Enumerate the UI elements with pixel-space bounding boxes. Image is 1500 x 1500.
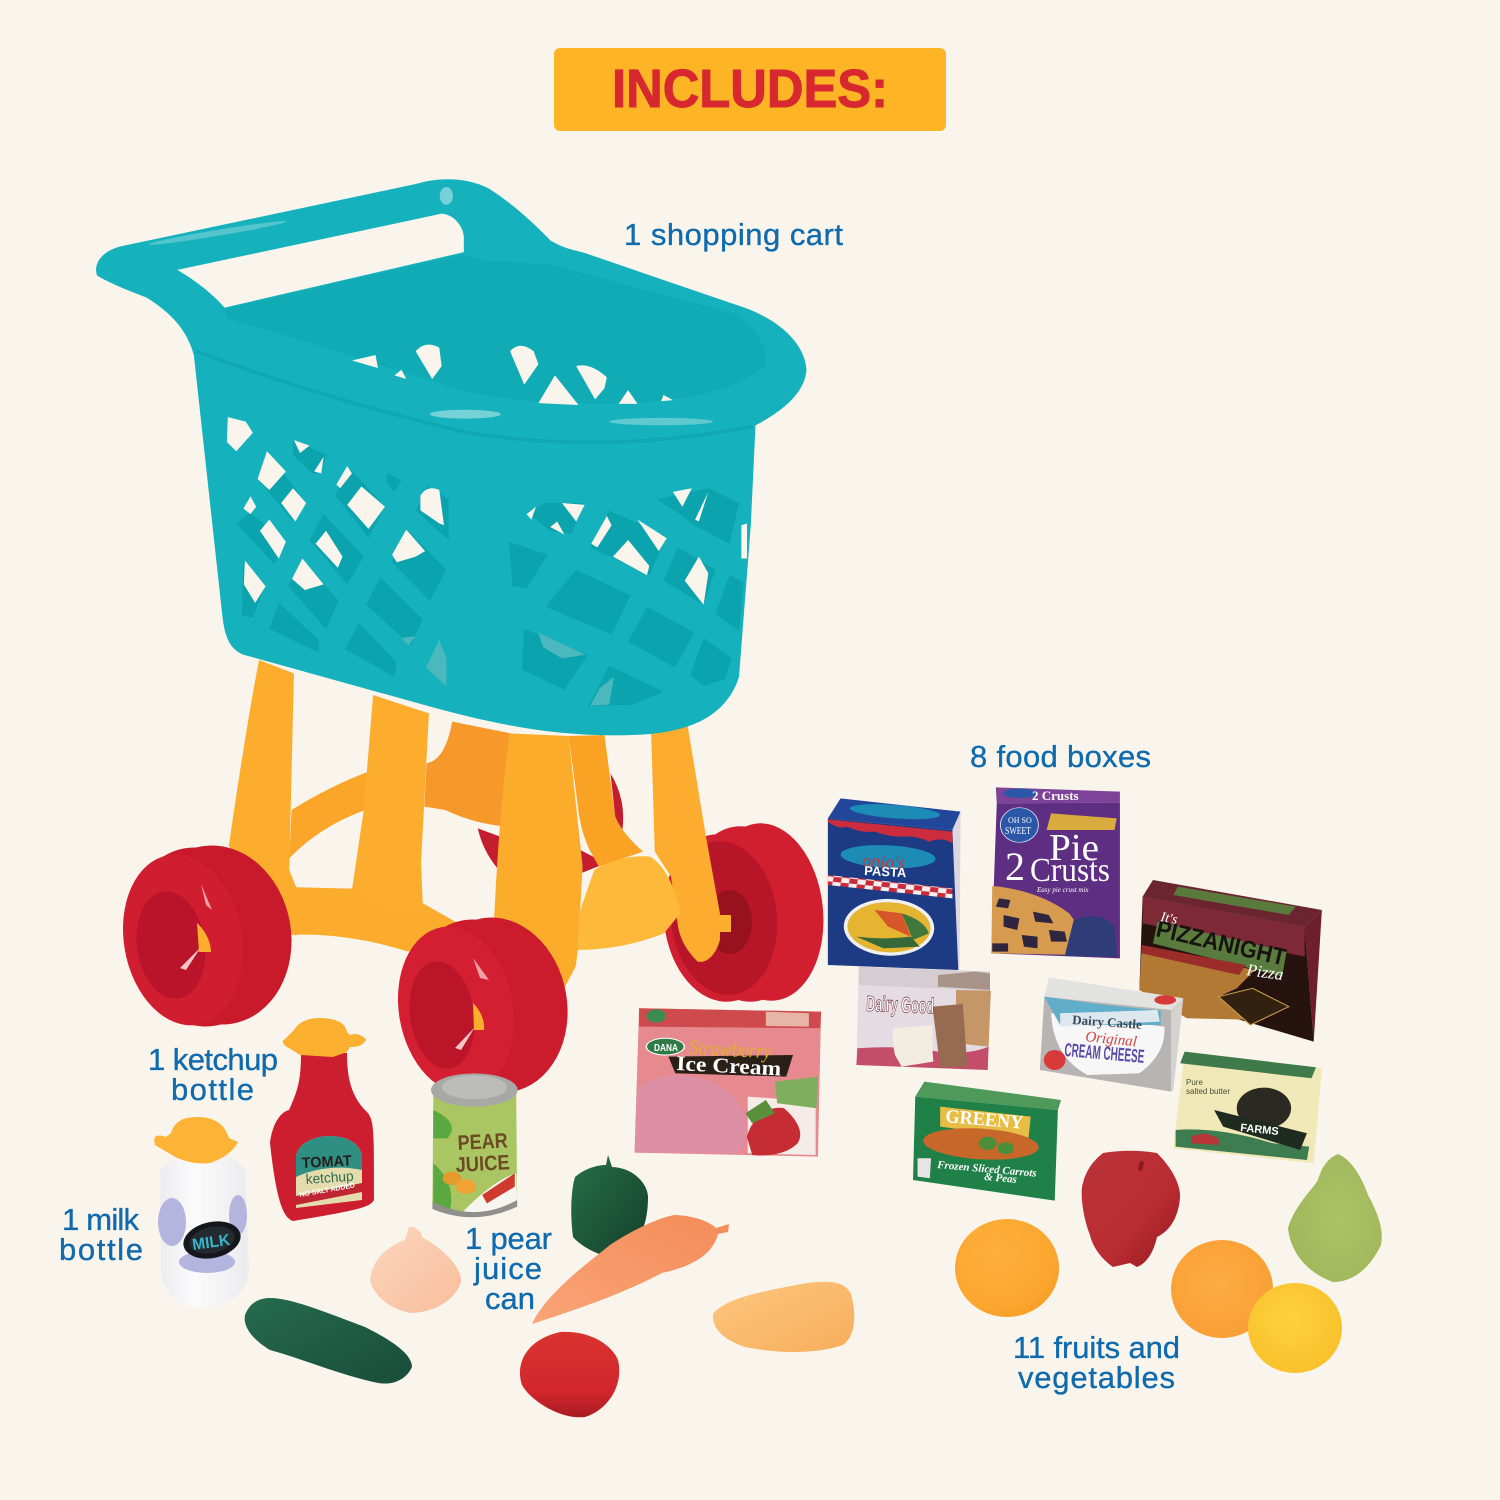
apple (1082, 1151, 1180, 1267)
cart front frame (229, 660, 720, 993)
green pepper (571, 1155, 648, 1258)
title badge (554, 48, 946, 131)
lattice windows (236, 440, 744, 706)
box: pasta (828, 798, 961, 970)
box: pizza: It's (1158, 910, 1179, 928)
box: ice cream (635, 1008, 821, 1157)
box: pasta: PASTA (864, 863, 907, 880)
squash (713, 1282, 854, 1352)
box: ice cream: Ice Cream (676, 1051, 782, 1081)
lighter see-through patches (402, 632, 614, 706)
pear juice can: PEAR (457, 1129, 508, 1155)
left leg (229, 660, 296, 937)
basket (96, 179, 806, 735)
basket interior (225, 254, 766, 404)
box: cream cheese (1040, 977, 1183, 1092)
front leg (494, 733, 583, 993)
box: pie crusts: Crusts (1030, 852, 1110, 889)
orange left (955, 1219, 1059, 1317)
label: 11 fruits and vegetables: 11 fruits and (1013, 1330, 1180, 1365)
box: pizza: PIZZANIGHT (1154, 916, 1289, 972)
wheel left (110, 834, 306, 1038)
label: 11 fruits and vegetables (1013, 1330, 1180, 1395)
arc brace (289, 772, 368, 858)
label: 1 ketchup bottle (148, 1042, 278, 1107)
label: 1 ketchup bottle: bottle (171, 1072, 254, 1107)
ketchup bottle: ketchup (305, 1168, 354, 1187)
box: pizza: Pizza (1244, 960, 1285, 984)
orange right (1171, 1240, 1273, 1338)
milk bottle (154, 1117, 249, 1308)
box: dairy good: Dairy Good (866, 991, 935, 1018)
box: pie crusts: 2 Crusts (1032, 788, 1079, 803)
ketchup bottle (270, 1018, 374, 1221)
box: dairy good (856, 967, 991, 1070)
label: 1 pear juice can: can (485, 1281, 535, 1316)
label: 8 food boxes: 8 food boxes (970, 739, 1151, 774)
box: ice cream: DANA (654, 1043, 678, 1054)
box: pizza (1139, 880, 1322, 1042)
label: 1 pear juice can: 1 pear (465, 1221, 552, 1256)
box: pie crusts: Easy pie crust mix (1036, 886, 1089, 894)
rim shadow (196, 351, 753, 442)
label: 1 pear juice can: juice (473, 1251, 542, 1286)
milk bottle: MILK (191, 1232, 232, 1254)
box: cream cheese: Dairy Castle (1072, 1012, 1143, 1032)
pear juice can (431, 1073, 518, 1217)
ketchup bottle: NO SALT ADDED (299, 1182, 355, 1199)
rear right strut (569, 735, 643, 867)
box: cream cheese: Original (1085, 1029, 1138, 1050)
box: farms butter: Pure (1186, 1078, 1203, 1087)
box: greeny: & Peas (984, 1171, 1017, 1186)
label: 1 milk bottle (59, 1202, 143, 1267)
box: farms butter: salted butter (1186, 1087, 1230, 1096)
box: farms butter (1173, 1052, 1322, 1163)
box: ice cream: Strawberry (689, 1035, 772, 1063)
onion (370, 1227, 461, 1313)
label: 1 pear juice can (465, 1221, 552, 1316)
label: 11 fruits and vegetables: vegetables (1018, 1360, 1175, 1395)
box: cream cheese: CREAM CHEESE (1064, 1040, 1145, 1068)
box: greeny: Frozen Sliced Carrots (936, 1159, 1037, 1180)
rim highlights (147, 187, 713, 425)
basket silhouette (96, 179, 806, 735)
label: 1 milk bottle: 1 milk (62, 1202, 140, 1237)
carrot (532, 1215, 729, 1324)
cucumber (245, 1298, 412, 1384)
tomato (520, 1332, 619, 1417)
box: pie crusts (991, 787, 1120, 958)
title badge: INCLUDES: (612, 59, 888, 119)
right wheel (656, 818, 832, 1008)
label: 1 ketchup bottle: 1 ketchup (148, 1042, 278, 1077)
pear juice can: JUICE (455, 1151, 510, 1177)
label: 1 shopping cart: 1 shopping cart (624, 217, 843, 252)
wheel lobe (578, 856, 680, 950)
back brace (424, 722, 510, 827)
shopping cart (96, 179, 832, 1106)
right leg and spoon (651, 718, 720, 962)
ketchup bottle: TOMAT (301, 1152, 352, 1172)
box: pie crusts: SWEET (1005, 826, 1031, 837)
lemon (1248, 1283, 1342, 1373)
cart frame (289, 722, 643, 873)
box: pie crusts: 2 (1005, 844, 1025, 889)
label: 1 milk bottle: bottle (59, 1232, 143, 1267)
base (273, 880, 464, 952)
box: pie crusts: Pie (1049, 827, 1099, 869)
box: pie crusts: OH SO (1008, 816, 1032, 825)
lattice openings (227, 417, 747, 605)
back holes (352, 345, 673, 405)
box: farms butter: FARMS (1240, 1122, 1279, 1138)
middle leg (352, 695, 429, 910)
back wheel peeks (478, 773, 623, 873)
wheel center (385, 906, 581, 1106)
pear (1288, 1154, 1382, 1282)
handle opening (177, 214, 464, 308)
box: greeny (913, 1082, 1061, 1201)
box: pasta: onio's (862, 850, 906, 873)
box: greeny: GREENY (945, 1106, 1024, 1134)
